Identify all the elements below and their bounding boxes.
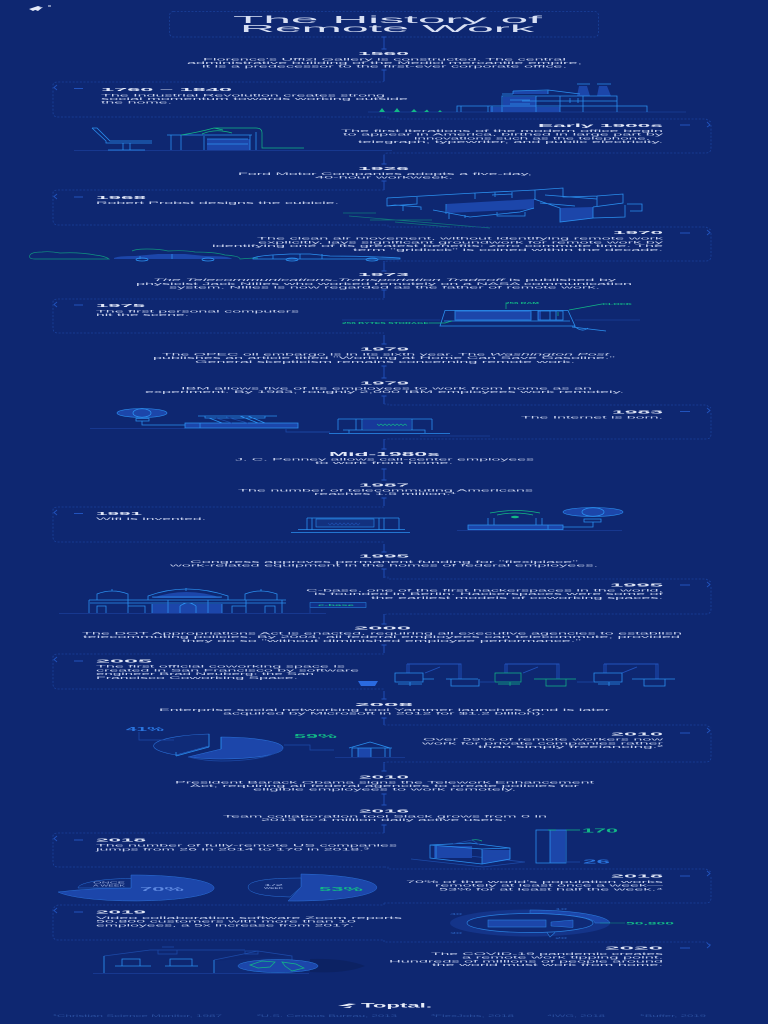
chart: remote worker pie: 41% — [126, 727, 166, 733]
icon: coworking desks — [358, 664, 675, 686]
panel: 2020: Hundreds of millions of people around — [389, 958, 663, 963]
text block: 1987 — [238, 483, 533, 496]
icon: video chat ring: 30 — [450, 931, 464, 935]
title — [170, 12, 598, 37]
text block: 1560: Florence's Uffizi Gallery is constructed. The central — [203, 56, 567, 61]
panel: 2010 freelancing: 2010 — [611, 731, 664, 737]
panel: 2005: engineer Brad Neuberg: the San — [96, 671, 314, 676]
panel: 2020 — [93, 940, 711, 974]
text block: 1560: administrative building of the Medici mercantile empire, — [187, 60, 582, 65]
text block: 1973: system. Nilles is now regarded as the father of remote work. — [169, 284, 600, 290]
panel: early 1900s: The first iterations of the modern office begin — [341, 128, 663, 133]
panel: 1760-1840 — [53, 81, 686, 117]
icon: cubicles — [343, 188, 642, 228]
text block: 2000: they do so "without diminished employee performance." — [182, 638, 584, 643]
panel: 1983 — [90, 404, 711, 441]
text block: 1979 OPEC: The OPEC oil embargo is in its sixth year. The Washington Post — [162, 352, 613, 356]
icon: personal computer: 256 RAM — [505, 302, 539, 305]
panel: 1975 — [53, 299, 640, 333]
icon: Toptal logo top-left — [29, 6, 51, 11]
panel: 2020: The COVID-19 pandemic creates — [431, 951, 663, 956]
text block: 1926: 40-hour workweek. — [315, 175, 453, 180]
panel: 2019 — [53, 903, 675, 940]
panel: 2005: 2005 — [96, 659, 153, 665]
chart: remote worker pie — [126, 727, 405, 761]
panel: 1970: explicitly, lays significant groundwork for remote work by — [258, 239, 663, 244]
panel: 2018 world population: 70% of the world's population works — [406, 879, 663, 884]
text block: 1979 OPEC: publishes an article titled "Working at Home Can Save Gasoline." — [153, 355, 618, 360]
text block: 1995 flexiplace: 1995 — [359, 554, 410, 560]
icon: personal computer — [342, 302, 640, 331]
footnotes: ³FlexJobs, 2018 — [431, 1014, 514, 1018]
icon: video chat ring: 50,800 — [626, 922, 675, 926]
panel: 1970: term "gridlock" is coined within the decade. — [353, 247, 663, 252]
chart: 53 percent pie — [248, 874, 377, 901]
text block: mid-1980s: to work from home. — [315, 460, 453, 465]
panel: 1760-1840: The Industrial Revolution creates strong — [101, 92, 385, 97]
panel: 2005: The first official coworking space is — [96, 664, 345, 669]
title: The History of — [233, 14, 542, 26]
panel: 2018 companies: 2018 — [96, 837, 147, 843]
chart: 53 percent pie: 53% — [319, 887, 363, 893]
text block: 2016: 2013 to 4 million daily active users. — [261, 817, 507, 822]
panel: 1995 c-base: 1995 — [610, 582, 664, 588]
panel: 1970: The clean air movement, without identifying remote work — [257, 236, 663, 241]
text block: 1560: 1560 — [358, 51, 410, 57]
panel: 2005 — [53, 654, 675, 689]
panel: 2005: created in San Francisco by software — [96, 667, 359, 672]
panel: 2020: the world must work from home. — [432, 962, 663, 967]
text block: 2008: acquired by Microsoft in 2012 for $1.2 billion). — [223, 711, 545, 716]
text block: 1926: 1926 — [358, 166, 410, 172]
icon: c-base building: c-base — [318, 603, 355, 607]
text block: mid-1980s — [235, 452, 534, 465]
title: Remote Work — [240, 23, 537, 35]
icon: computer and wifi router — [291, 508, 623, 532]
panel: early 1900s: telegraph, typewriter, and public electricity. — [358, 139, 663, 144]
logo: Toptal: Toptal. — [361, 1004, 433, 1010]
panel: 2018 companies — [53, 828, 619, 867]
panel: 1968 — [53, 188, 642, 228]
icon: house — [335, 742, 405, 758]
panel: early 1900s — [74, 117, 711, 155]
icon: video chat ring: 40 — [450, 912, 464, 916]
text block: 1973: The Telecommunications-Transportation Tradeoff is published by — [153, 277, 616, 282]
text block: 2010 Telework: Act, requiring all federal agencies to create policies for — [190, 783, 582, 788]
panel: 1760-1840: social momentum towards working outside — [101, 96, 408, 101]
footnotes — [53, 1014, 706, 1018]
footnotes: ⁵Buffer, 2019 — [640, 1014, 706, 1018]
panel: 1968: 1968 — [96, 195, 147, 201]
text block: 1926 — [238, 166, 532, 180]
icon: office building and bar chart: 26 — [583, 860, 611, 866]
panel: 1975: hit the scene. — [96, 312, 189, 317]
icon: office desk and chair — [74, 128, 392, 150]
chart: 70 percent pie: 70% — [140, 887, 184, 893]
panel: 2010 freelancing: than simply freelancing.² — [478, 744, 666, 749]
icon: office building and bar chart — [411, 828, 619, 867]
panel: 2018 companies: The number of fully-remote US companies — [96, 843, 397, 848]
icon: video chat ring: 10 — [555, 907, 569, 911]
text block: 2000: telecommuting policies. By 2004, all federal employees can telecommute, provided — [83, 634, 680, 639]
panel: 1983: The Internet is born. — [521, 415, 663, 420]
panel: 1995 c-base: the earliest models of coworking spaces. — [371, 595, 663, 600]
text block: 2016 — [223, 808, 547, 822]
text block: 1995 flexiplace — [170, 554, 598, 568]
chart: 70 percent pie: A WEEK — [93, 884, 126, 888]
panel: 2018 companies: jumps from 26 in 2014 to 170 in 2018.³ — [92, 846, 372, 851]
text block: 1973: physicist Jack Nilles who worked remotely on a NASA communication — [136, 281, 632, 286]
icon: factory — [368, 84, 686, 112]
panel: 1995 c-base: C-base, one of the first hackerspaces in the world, — [306, 588, 663, 592]
panel: 1970: 1970 — [613, 230, 664, 236]
panel: 1968: Robert Probst designs the cubicle. — [96, 200, 339, 205]
panel: 2019: 2019 — [96, 910, 147, 916]
text block: mid-1980s: Mid-1980s — [329, 452, 440, 458]
panel: 1760-1840: the home. — [101, 100, 172, 105]
chart: remote worker pie: 59% — [294, 734, 339, 740]
panel: 2020: a remote work tipping point. — [462, 955, 663, 960]
panel: 1970 — [30, 225, 711, 263]
panel: 1991: Wifi is invented. — [96, 516, 206, 521]
text block: 2010 Telework: eligible employees to work remotely. — [253, 787, 516, 792]
panel: 1995 c-base: is founded in Berlin. Hackerspaces were some of — [314, 591, 667, 596]
text block: 1987: reaches 1.5 million.¹ — [314, 491, 459, 496]
text block: 2008: 2008 — [355, 702, 414, 708]
panel: early 1900s: innovations such as the telephone, — [414, 135, 650, 140]
text block: 1973 — [136, 272, 632, 290]
text block: 1979 IBM — [145, 380, 624, 394]
text block: 2000: The DOT Appropriations Act is enacted, requiring all executive agencies to establish — [82, 630, 682, 636]
text block: 1979 OPEC: General skepticism remains concerning remote work. — [195, 359, 575, 364]
panel: 1983: 1983 — [612, 410, 664, 416]
panel: 2018 world population: 53% for at least half the week.⁴ — [439, 886, 664, 891]
panel: 2010 freelancing — [126, 725, 711, 764]
panel: 1995 c-base — [59, 577, 711, 616]
panel: 2019: Video collaboration software Zoom reports — [96, 915, 402, 920]
text block: 1979 OPEC — [153, 346, 618, 364]
chart: 53 percent pie: WEEK — [264, 886, 284, 890]
footnotes: ¹Christian Science Monitor, 1987 — [53, 1014, 222, 1018]
text block: 1979 IBM: IBM allows five of its employees to work from home as an — [181, 385, 592, 390]
panel: 2018 world population: 2018 — [611, 874, 664, 880]
footnotes: ⁴IWG, 2018 — [547, 1014, 605, 1018]
panel: early 1900s: Early 1900s — [538, 123, 664, 129]
text block: 1979 OPEC: 1979 — [360, 346, 410, 352]
text block: 2016: 2016 — [359, 808, 410, 814]
chart: 70 percent pie: ONCE — [93, 880, 126, 884]
panel: 2019: employees, a 5x increase from 2017. — [96, 922, 354, 927]
text block: 1560: it is a predecessor to the first-ever corporate office. — [202, 64, 567, 69]
panel: 1991: 1991 — [96, 511, 143, 517]
text block: 1995 flexiplace: Congress approves permanent funding for "flexiplace" — [190, 559, 581, 564]
text block: 2000: 2000 — [354, 625, 412, 631]
panel: 1975: The first personal computers — [96, 308, 299, 313]
text block: 1560 — [187, 51, 582, 69]
text block: 2010 Telework: 2010 — [359, 774, 410, 780]
panel: 1991 — [53, 507, 623, 542]
icon: office building and bar chart: 170 — [582, 828, 619, 834]
text block: 1987: 1987 — [359, 483, 410, 489]
icon: personal computer: 256 BYTES STORAGE — [342, 322, 430, 325]
text block: 1995 flexiplace: work-related equipment in the homes of federal employees. — [170, 563, 598, 568]
text block: 1973: 1973 — [358, 272, 410, 278]
panel: early 1900s: to appear in America, birthed in large part by — [343, 132, 663, 137]
panel: 2018 world population — [58, 867, 711, 903]
logo: Toptal — [338, 1004, 433, 1010]
text block: 2016: Team collaboration tool Slack grows from 0 in — [223, 813, 547, 818]
icon: globe, router and computer — [90, 408, 490, 436]
panel: 2019: 50,800 customers with more than 10 — [96, 919, 359, 924]
panel: 2005: Francisco Coworking Space. — [96, 675, 298, 680]
panel: 1975: 1975 — [96, 303, 146, 309]
text block: 2008 — [159, 702, 613, 716]
icon: personal computer: CLOCK — [602, 303, 633, 306]
footnotes: ²U.S. Census Bureau, 2013 — [257, 1014, 397, 1018]
panel: 1760-1840: 1760 – 1840 — [101, 87, 233, 93]
icon: video chat ring: 20 — [555, 936, 569, 940]
text block: 1979 IBM: 1979 — [360, 380, 410, 386]
panel: 2020: 2020 — [605, 945, 664, 951]
icon: c-base building — [59, 588, 366, 614]
text block: 2000 — [82, 625, 682, 643]
panel: 2010 freelancing: work for private companies rather — [422, 740, 666, 745]
text block: 1987: The number of telecommuting Americans — [238, 488, 533, 492]
text block: 2008: Enterprise social networking tool Yammer launches (and is later — [159, 707, 613, 712]
text block: mid-1980s: J. C. Penney allows call-center employees — [235, 456, 534, 462]
text block: 1926: Ford Motor Companies adopts a five-day, — [238, 171, 532, 176]
panel: 2018 world population: remotely at least once a week— — [435, 883, 663, 888]
icon: house and globe — [93, 947, 365, 974]
icon: clouds and cars — [30, 249, 400, 261]
chart: 70 percent pie — [58, 875, 214, 901]
text block: 2010 Telework: President Barack Obama signs the Telework Enhancement — [175, 779, 598, 784]
panel: 2010 freelancing: Over 59% of remote workers now — [423, 737, 664, 742]
text block: 2010 Telework — [175, 774, 598, 792]
chart: 53 percent pie: 1/2 — [264, 883, 286, 887]
text block: 1979 IBM: experiment. By 1983, roughly 2,000 IBM employees work remotely. — [145, 389, 624, 394]
connectors — [382, 37, 386, 833]
panel: 1970: identifying one of its greatest benefits: zero commute time. The — [212, 243, 663, 248]
icon: video chat ring — [450, 907, 675, 940]
